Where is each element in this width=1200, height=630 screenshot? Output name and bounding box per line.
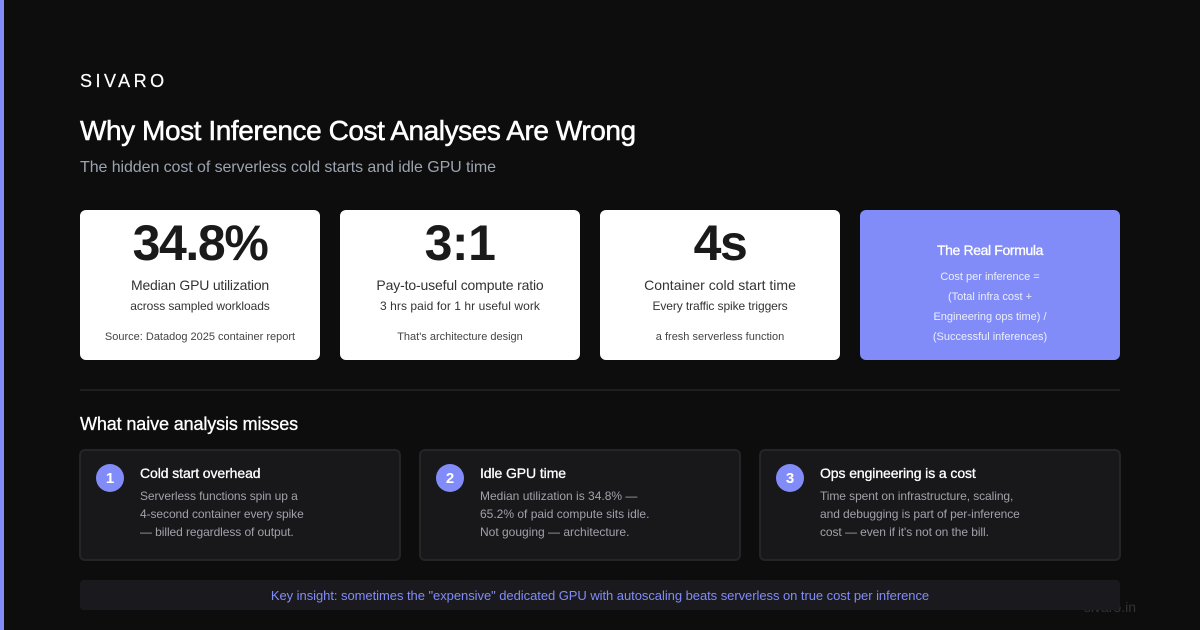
panel: idle GPU time [419, 449, 741, 561]
item description: — billed regardless of output. [140, 525, 294, 539]
item heading: Ops engineering is a cost [820, 465, 976, 481]
formula line 4: (Successful inferences) [933, 331, 1047, 343]
number badge 1 [96, 464, 124, 492]
stat value: 4s [694, 215, 746, 271]
item description: Median utilization is 34.8% — [480, 489, 637, 503]
item description: and debugging is part of per-inference [820, 507, 1020, 521]
stat label: Container cold start time [644, 277, 796, 293]
formula line 2: (Total infra cost + [948, 291, 1032, 303]
item description [140, 489, 304, 539]
title: Why Most Inference Cost Analyses Are Wrong [80, 115, 636, 146]
stat source: Source: Datadog 2025 container report [105, 331, 295, 343]
stat note: a fresh serverless function [656, 331, 784, 343]
stat label: Pay-to-useful compute ratio [376, 277, 544, 293]
item description: Not gouging — architecture. [480, 525, 629, 539]
stat note: That's architecture design [397, 331, 523, 343]
subtitle: The hidden cost of serverless cold starts and idle GPU time [80, 159, 496, 176]
formula line 1: Cost per inference = [940, 271, 1040, 283]
panel: cold start overhead [79, 449, 401, 561]
number badge 1: 1 [106, 470, 114, 487]
item heading: Cold start overhead [140, 465, 260, 481]
formula line 3: Engineering ops time) / [933, 311, 1047, 323]
stat detail: 3 hrs paid for 1 hr useful work [380, 299, 540, 313]
stat value: 3:1 [425, 215, 495, 271]
stat value: 34.8% [133, 215, 267, 271]
item heading: Idle GPU time [480, 465, 566, 481]
number badge 2 [436, 464, 464, 492]
watermark: sivaro.in [1084, 599, 1136, 615]
item description [480, 489, 649, 539]
stat detail: across sampled workloads [130, 299, 270, 313]
key insight banner: Key insight: sometimes the "expensive" dedicated GPU with autoscaling beats serverless on true cost per inference [271, 588, 929, 603]
item description [820, 489, 1020, 539]
number badge 3: 3 [786, 470, 794, 487]
panel: ops engineering [759, 449, 1121, 561]
panel: GPU utilization stat [80, 210, 320, 360]
stat detail: Every traffic spike triggers [652, 299, 788, 313]
item description: 4-second container every spike [140, 507, 304, 521]
panel: compute ratio stat [340, 210, 580, 360]
item description: Serverless functions spin up a [140, 489, 298, 503]
number badge 3 [776, 464, 804, 492]
section heading: What naive analysis misses [80, 414, 298, 434]
panel: the real formula [860, 210, 1120, 360]
item description: cost — even if it's not on the bill. [820, 525, 989, 539]
panel: cold start stat [600, 210, 840, 360]
key insight banner [80, 580, 1120, 610]
stat label: Median GPU utilization [131, 277, 269, 293]
brand wordmark: SIVARO [80, 71, 168, 91]
left accent bar [0, 0, 4, 630]
formula heading: The Real Formula [937, 242, 1043, 258]
item description: Time spent on infrastructure, scaling, [820, 489, 1013, 503]
number badge 2: 2 [446, 470, 454, 487]
item description: 65.2% of paid compute sits idle. [480, 507, 649, 521]
